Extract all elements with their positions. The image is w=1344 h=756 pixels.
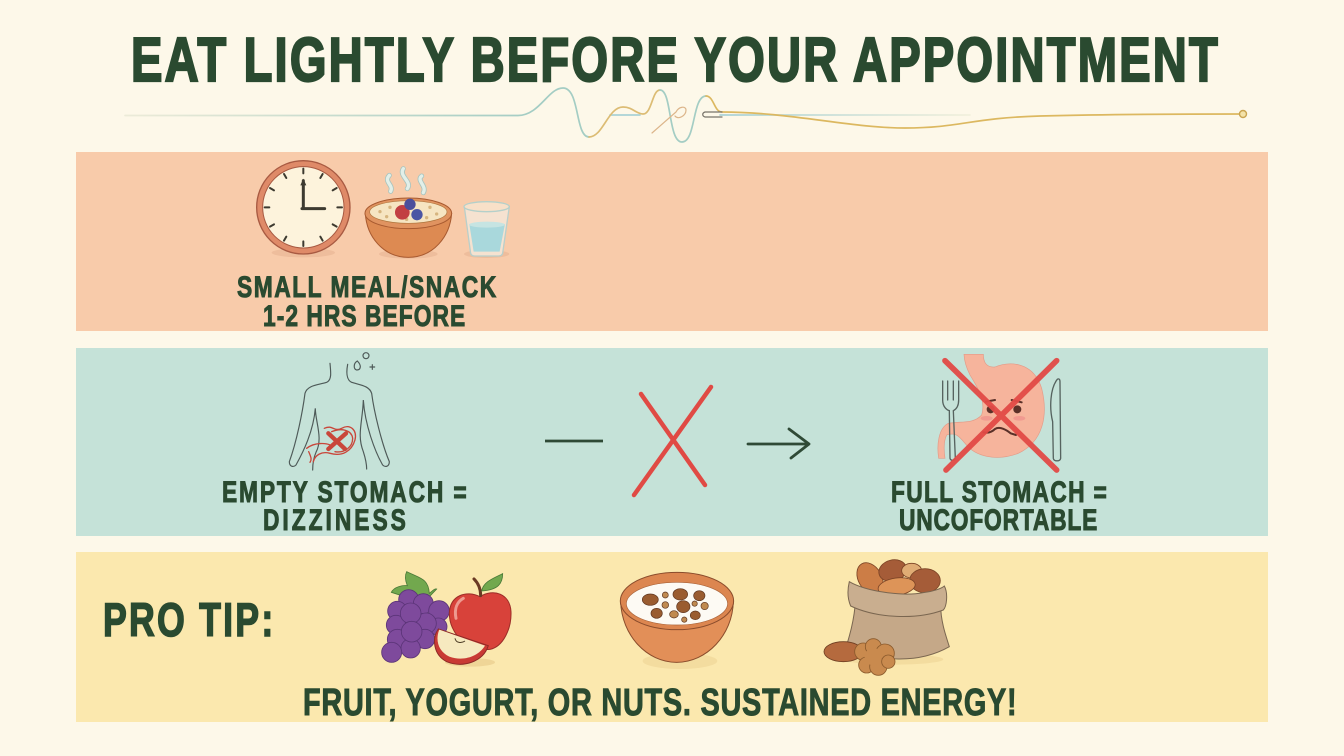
icon: red cross xyxy=(634,387,711,495)
dash xyxy=(545,440,603,442)
icon: empty stomach body outline xyxy=(289,353,389,470)
tip text: FRUIT, YOGURT, OR NUTS. SUSTAINED ENERGY! xyxy=(303,681,1017,724)
label: small meal: SMALL MEAL/SNACK xyxy=(237,270,496,304)
heading: pro tip: PRO TIP: xyxy=(103,593,273,646)
icon: steaming oatmeal bowl xyxy=(365,169,452,259)
icon: grapes and apple xyxy=(382,572,511,667)
knife xyxy=(1051,379,1061,461)
fork xyxy=(943,381,959,460)
label: empty stomach: EMPTY STOMACH = xyxy=(222,475,467,509)
label: full stomach xyxy=(891,475,1107,537)
icon: full stomach crossed out xyxy=(938,354,1061,470)
title: EAT LIGHTLY BEFORE YOUR APPOINTMENT xyxy=(131,25,1218,95)
icon: sack of nuts xyxy=(824,557,949,675)
panel: empty vs full stomach xyxy=(76,348,1268,537)
thread and needle divider xyxy=(125,88,1246,142)
panel: small meal timing xyxy=(76,152,1268,333)
arrow xyxy=(748,429,809,458)
label: full stomach: FULL STOMACH = xyxy=(891,475,1107,509)
icon: yogurt bowl with granola xyxy=(620,572,734,669)
label: empty stomach: DIZZINESS xyxy=(263,503,406,537)
panel: pro tip xyxy=(76,552,1268,724)
icon: glass of water xyxy=(464,202,509,258)
label: small meal xyxy=(237,270,496,333)
label: empty stomach xyxy=(222,475,467,537)
label: small meal: 1-2 HRS BEFORE xyxy=(263,299,465,333)
icon: clock xyxy=(257,161,350,257)
label: full stomach: UNCOFORTABLE xyxy=(899,503,1097,537)
